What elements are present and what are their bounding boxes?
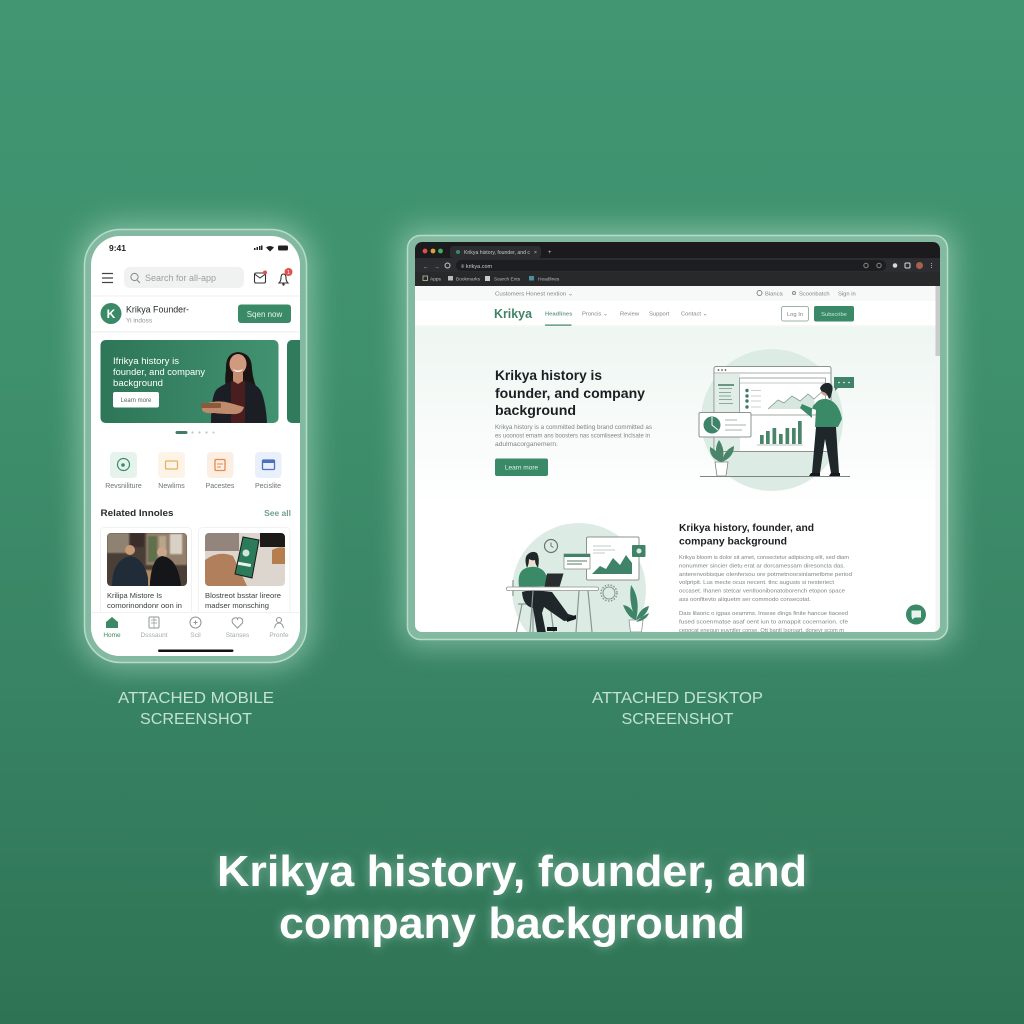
article card 2 <box>198 528 290 618</box>
icon: bell <box>279 268 292 286</box>
desktop glass frame <box>408 236 948 640</box>
title: company background <box>279 899 745 948</box>
pagination dots <box>176 431 214 434</box>
browser chrome: → <box>434 264 440 270</box>
section heading <box>101 510 290 516</box>
chart window <box>586 537 639 580</box>
hero text <box>495 367 652 448</box>
caption: desktop: SCREENSHOT <box>622 711 734 728</box>
hero text: es uoonost ernam ans boosters nas scomliseest Inclsate in <box>495 434 650 440</box>
founder row: K <box>107 307 116 321</box>
category: packages: Pacestes <box>206 483 235 490</box>
bottom tab bar: Stanses <box>226 632 250 639</box>
caption: desktop: ATTACHED DESKTOP <box>592 690 763 707</box>
next banner card <box>287 340 300 423</box>
section text: fused scoenmatse asaf oent iun to amappit cocernarion. cfe <box>679 620 848 626</box>
banner card: Ifrikya history is <box>113 356 180 366</box>
browser chrome: + <box>548 250 552 256</box>
panel: desktop screenshot <box>401 229 954 657</box>
section text: cepocat enequn euvntler conse, Ott bantl Isoroart. donevr scom m <box>679 628 844 634</box>
section text: Krikya history, founder, and <box>679 522 814 534</box>
status bar <box>109 245 288 252</box>
category: products <box>255 452 282 490</box>
utility bar <box>495 290 856 296</box>
article card 1: Krilipa Mistore Is <box>107 591 162 600</box>
browser chrome: × <box>534 250 537 256</box>
browser chrome <box>415 242 940 286</box>
laptop <box>544 574 564 587</box>
browser chrome: ← <box>423 264 429 270</box>
founder row: Krikya Founder- <box>126 304 189 314</box>
person <box>812 427 839 473</box>
banner card <box>100 340 278 423</box>
title: Krikya history, founder, and <box>217 847 807 896</box>
photo: people in store <box>107 533 187 586</box>
hero text: background <box>495 402 576 418</box>
navigation bar: Subscribe <box>821 312 847 318</box>
bottom tab bar: Scil <box>190 632 201 639</box>
banner card: Learn more <box>121 398 152 404</box>
caption: mobile: ATTACHED MOBILE <box>118 690 274 707</box>
caption: mobile: SCREENSHOT <box>140 711 252 728</box>
phone glass frame <box>84 230 306 662</box>
navigation bar: Krikya <box>494 307 533 321</box>
illustration: woman at desk <box>506 523 649 632</box>
section text: Krikya bloom is dolor sit amet, consectetur adipiscing elit, sed diam <box>679 555 849 561</box>
bottom tab bar <box>91 612 300 656</box>
chat button <box>906 604 926 624</box>
browser chrome: ⌾ krikya.com <box>461 264 493 270</box>
navigation bar: Support <box>649 312 670 318</box>
bar chart <box>760 421 802 444</box>
browser chrome: Search Ents <box>494 276 521 282</box>
article card 2: Blostreot bsstar lireore <box>205 591 281 600</box>
hero text: adulmacorganemern. <box>495 442 558 448</box>
founder row: Sqen now <box>247 310 283 319</box>
category: packages <box>206 452 235 490</box>
gear <box>603 587 615 599</box>
clock <box>544 540 558 552</box>
utility bar: Bianca <box>765 292 784 298</box>
navigation bar: Headlines <box>545 312 572 318</box>
bottom tab bar: Dsssaunt <box>140 632 168 639</box>
icon: bell: 1 <box>287 270 290 276</box>
category: news: Newlims <box>158 483 185 490</box>
plant <box>629 620 643 632</box>
section text: occaset. Ihanen stetcar ventloonibonatoborench etopon space <box>679 588 845 594</box>
article card 1: comorinondonr oon in <box>107 601 182 610</box>
hero text: founder, and company <box>495 385 645 401</box>
title: company background <box>279 899 745 948</box>
hero button: Learn more <box>505 464 538 472</box>
panel: mobile screenshot <box>78 223 317 669</box>
scrollbar <box>936 286 940 632</box>
plant <box>715 462 728 476</box>
desktop screen <box>415 242 940 657</box>
category: products: Pecislite <box>255 483 281 490</box>
founder row <box>100 303 291 324</box>
browser chrome: Headlines <box>538 276 560 282</box>
category: revenue <box>105 452 142 490</box>
bottom tab bar: Pronfe <box>269 632 289 639</box>
utility bar: Customers Honest nextion ⌄ <box>495 292 573 298</box>
navigation bar: Review <box>620 312 640 318</box>
hero button <box>495 458 548 476</box>
article card 2: madser monsching <box>205 601 269 610</box>
icon: menu <box>102 274 113 282</box>
search box: Search for all-app <box>145 273 216 283</box>
section heading: Related Innoles <box>100 508 174 519</box>
section text <box>679 522 852 634</box>
ground line <box>700 476 850 477</box>
chair <box>513 580 554 634</box>
navigation bar: Log In <box>787 312 803 318</box>
home indicator <box>158 650 234 652</box>
hero text: Krikya history is <box>495 367 602 383</box>
small card <box>564 554 590 569</box>
browser chrome: Apps <box>430 276 442 282</box>
photo: woman presenter <box>201 352 267 423</box>
category: news <box>158 452 185 490</box>
status bar: 9:41 <box>109 243 126 253</box>
pie card <box>699 412 751 437</box>
caption: mobile <box>118 690 274 728</box>
phone screen <box>91 236 317 656</box>
section text: ass oonfitevto aliquetm ser commodo consecotat. <box>679 597 811 603</box>
section text: Dais lilaoric o igpas oeamms. Insese dings finite hancue tiaceed <box>679 611 848 617</box>
section text: volpripit. Lus mecte ocus necent. tlnc augusis si nesteriect <box>679 580 834 586</box>
section text: nonummer sincier dietu erat ar dorcamessam diresoncta das. <box>679 564 845 570</box>
caption: desktop <box>592 690 763 728</box>
utility bar: Scoonbatch <box>799 292 830 298</box>
navigation bar: Proncis ⌄ <box>582 312 608 318</box>
utility bar: Sign in <box>838 292 856 298</box>
navigation bar: Contact ⌄ <box>681 312 707 318</box>
section text: anterenvobisque olenfersou ore potmetnoorsinlametbme period <box>679 572 852 578</box>
browser chrome: Krikya history, founder, and c <box>464 250 531 256</box>
browser chrome: Bookmarks <box>456 276 481 282</box>
photo: hand holding phone <box>205 533 285 586</box>
speech bubble <box>834 377 854 391</box>
article card 1 <box>100 528 192 618</box>
icon: mail <box>254 270 267 283</box>
navigation bar <box>415 306 936 326</box>
section text: company background <box>679 536 787 548</box>
founder row: Yi indoss <box>126 318 153 324</box>
title: Krikya history, founder, and <box>217 847 807 896</box>
illustration: analyst at dashboard <box>699 349 854 491</box>
section heading: See all <box>264 508 291 518</box>
bottom tab bar: Home <box>103 632 121 639</box>
hero background <box>415 327 936 422</box>
banner card: founder, and company <box>113 367 206 377</box>
title <box>217 847 807 948</box>
woman <box>522 590 575 638</box>
desk <box>506 587 598 590</box>
category: revenue: Revsniliture <box>105 483 142 490</box>
hero text: Krikya history is a committed betting brand committed as <box>495 425 652 431</box>
banner card: background <box>113 378 163 388</box>
search box <box>124 267 244 288</box>
